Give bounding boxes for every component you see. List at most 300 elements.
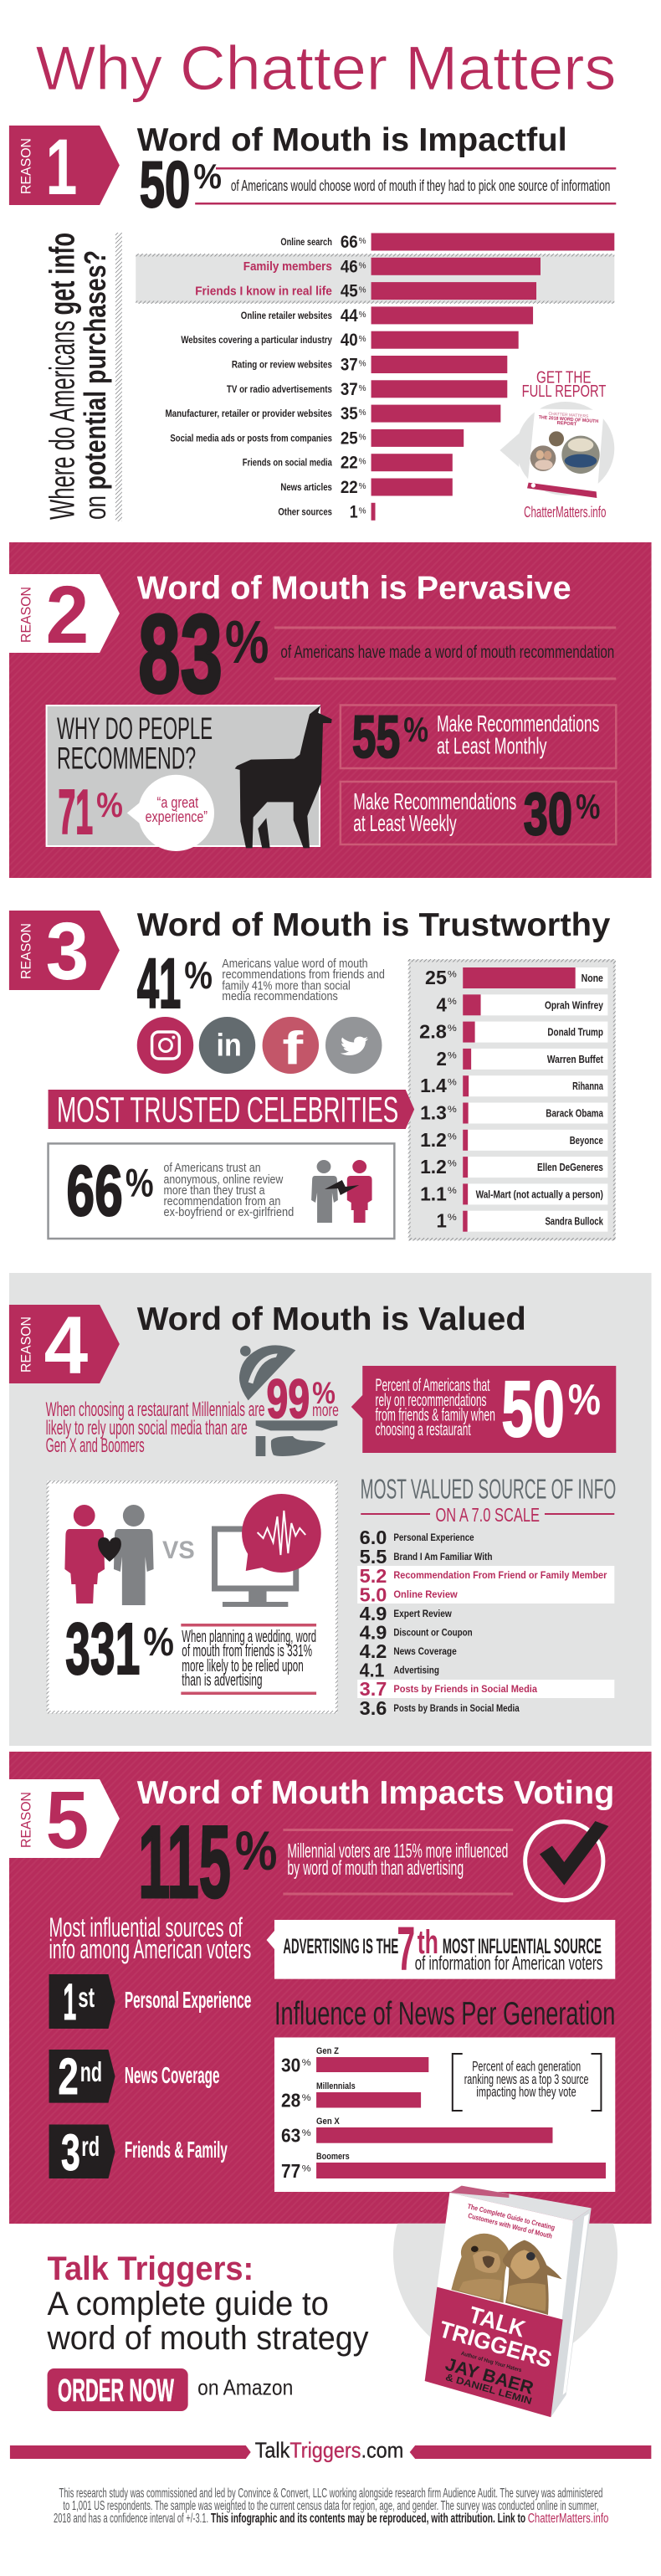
- heading: Word of Mouth is Impactful: [137, 122, 567, 158]
- icon: break-up couple: [311, 1160, 372, 1223]
- rank 2: news coverage: 2: [58, 2048, 79, 2105]
- callout: 50 percent rely on recommendations: rely on recommendations: [376, 1391, 486, 1410]
- icon: report cover: CHATTER MATTERS: [548, 412, 589, 419]
- book: talk triggers: JAY BAER: [443, 2354, 535, 2399]
- celebrity row: sandra bullock: 1: [436, 1210, 447, 1232]
- rating row: brand familiar: [360, 1546, 492, 1568]
- panel: 66 percent anonymous review: anonymous, online review: [163, 1173, 284, 1187]
- bar row: industry websites: 40: [341, 331, 358, 350]
- callout: 50 percent rely on recommendations: choosing a restaurant: [376, 1420, 471, 1439]
- stat: 331 percent: than is advertising: [182, 1671, 263, 1690]
- celebrity row: rihanna: Rihanna: [572, 1080, 603, 1092]
- stat: 331 percent: [65, 1609, 316, 1695]
- stat box: recommend monthly: 55: [352, 704, 400, 770]
- panel: 66 percent anonymous review: of Americans trust an: [163, 1161, 261, 1175]
- rating row: discount or coupon: Discount or Coupon: [393, 1627, 473, 1639]
- text: talk triggers headline: word of mouth strategy: [47, 2320, 369, 2357]
- celebrity row: oprah winfrey: %: [448, 997, 457, 1007]
- bar: boomers: Boomers: [316, 2152, 350, 2162]
- stat box: recommend monthly: [341, 704, 616, 770]
- reason tag 5: [9, 1776, 120, 1865]
- reason tag 3: 3: [46, 907, 89, 997]
- bar row: family members: %: [359, 261, 366, 270]
- stat: 99 percent more: When choosing a restaurant Millennials are: [46, 1398, 265, 1421]
- reason tag 5: REASON: [18, 1792, 34, 1848]
- stat: 115 percent: [138, 1804, 513, 1919]
- text: talk triggers headline: [47, 2250, 369, 2357]
- bracketed note: impacting how they vote: [476, 2084, 576, 2100]
- rating row: expert review: [360, 1603, 452, 1624]
- rating row: posts by brands: Posts by Brands in Social Media: [393, 1702, 520, 1714]
- callout: get the full report: [500, 368, 614, 521]
- rating row: posts by brands: [360, 1697, 520, 1719]
- footnote: 2018 and has a confidence interval of +/-3.1.: [54, 2512, 208, 2526]
- bracketed note: [453, 2054, 601, 2111]
- rating row: personal experience: [360, 1527, 474, 1548]
- bar row: social media ads: Social media ads or posts from companies: [170, 434, 332, 444]
- panel: wedding planning: [47, 1480, 338, 1714]
- callout: 50 percent rely on recommendations: from friends & family when: [376, 1406, 495, 1425]
- stat: 83 percent: [138, 593, 616, 716]
- rank 2: news coverage: News Coverage: [125, 2062, 219, 2088]
- banner: most trusted celebrities: [49, 1090, 414, 1130]
- bar row: other sources: [278, 502, 376, 521]
- celebrity row: donald trump: 2.8: [419, 1021, 447, 1043]
- reason tag 4: [9, 1301, 120, 1391]
- celebrity row: none: None: [582, 972, 603, 984]
- celebrity row: rihanna: 1.4: [420, 1075, 447, 1096]
- rating row: recommendation: 5.2: [360, 1565, 387, 1587]
- panel: 66 percent anonymous review: 66: [66, 1151, 123, 1230]
- stat: 99 percent more: 99: [267, 1368, 310, 1429]
- book: talk triggers: [393, 2186, 617, 2417]
- rating row: personal experience: 6.0: [360, 1527, 387, 1548]
- bar: millennials: 28: [281, 2090, 300, 2112]
- stat: 331 percent: 331: [65, 1609, 140, 1690]
- bar: gen z: 30: [281, 2055, 300, 2076]
- bar row: online search: %: [359, 237, 366, 246]
- panel: why do people recommend: WHY DO PEOPLE: [57, 711, 213, 746]
- rating row: advertising: 4.1: [360, 1660, 385, 1681]
- bar row: family members: [243, 257, 541, 276]
- bar row: friends in real life: [195, 282, 536, 301]
- panel: 66 percent anonymous review: recommendation from an: [163, 1194, 280, 1208]
- celebrity row: barack obama: Barack Obama: [546, 1106, 604, 1120]
- callout: get the full report: GET THE: [536, 368, 592, 387]
- rank 3: friends and family: 3: [61, 2124, 80, 2181]
- stat box: recommend monthly: at Least Monthly: [437, 732, 546, 758]
- stat: 50 percent: 50: [140, 149, 190, 221]
- bar: gen z: %: [302, 2058, 311, 2068]
- bar chart: information sources: [165, 233, 614, 521]
- reason tag 4: REASON: [18, 1316, 34, 1373]
- stat: 50 percent: [140, 149, 616, 221]
- footer banner: talktriggers.com: [10, 2439, 651, 2462]
- bar: millennials: Millennials: [316, 2081, 356, 2091]
- stat: 99 percent more: more: [312, 1401, 339, 1420]
- rank 1: personal experience: Personal Experience: [125, 1987, 251, 2013]
- bar row: news articles: [280, 478, 453, 497]
- text: most influential sources: Most influential sources of: [49, 1912, 243, 1942]
- celebrity row: wal-mart: 1.1: [420, 1183, 447, 1204]
- celebrity row: ellen degeneres: %: [448, 1159, 457, 1169]
- icon: report cover: [527, 408, 604, 498]
- bar row: other sources: Other sources: [278, 507, 332, 517]
- rank 1: personal experience: st: [78, 1982, 95, 2013]
- bar row: online search: Online search: [280, 238, 332, 248]
- callout: advertising is the 7th: 7: [397, 1914, 415, 1983]
- reason tag 1: REASON: [18, 138, 34, 194]
- icon: report cover: REPORT: [556, 421, 577, 428]
- button: order now: ORDER NOW: [58, 2373, 174, 2409]
- bar row: online retailer websites: %: [359, 310, 366, 320]
- rating row: brand familiar: 5.5: [360, 1546, 387, 1568]
- bar: gen x: [281, 2117, 552, 2147]
- rating row: news coverage: [360, 1640, 457, 1662]
- callout: advertising is the 7th: th: [418, 1924, 438, 1961]
- celebrity row: rihanna: [420, 1075, 607, 1096]
- rating row: expert review: 4.9: [360, 1603, 387, 1624]
- bar row: family members: Family members: [243, 259, 332, 274]
- stat: 83 percent: %: [225, 609, 269, 676]
- bar row: other sources: %: [359, 506, 366, 516]
- bar: boomers: %: [302, 2163, 311, 2174]
- icon: linkedin: in: [216, 1028, 242, 1064]
- bar row: online retailer websites: 44: [341, 306, 358, 326]
- icon: report cover: THE 2018 WORD OF MOUTH: [538, 415, 598, 424]
- rank 2: news coverage: nd: [80, 2056, 102, 2087]
- callout: get the full report: ChatterMatters.info: [524, 504, 606, 521]
- book: talk triggers: TRIGGERS: [437, 2316, 555, 2373]
- bar row: online search: 66: [341, 233, 358, 252]
- bar row: online search: [280, 233, 614, 252]
- celebrity row: donald trump: Donald Trump: [547, 1026, 603, 1039]
- reason tag 2: 2: [46, 571, 89, 660]
- icon: facebook: [263, 1017, 319, 1075]
- text: talk triggers headline: A complete guide to: [48, 2286, 329, 2322]
- vertical chart question: get info: [42, 233, 81, 315]
- celebrity row: ellen degeneres: 1.2: [420, 1156, 447, 1178]
- rank 3: friends and family: rd: [81, 2131, 100, 2162]
- bar: gen x: Gen X: [316, 2117, 340, 2127]
- stat: 83 percent: 83: [138, 593, 223, 716]
- panel: most valued source of info: [357, 1473, 616, 1719]
- bar: gen x: %: [302, 2128, 311, 2138]
- celebrity row: none: [425, 967, 607, 988]
- callout: get the full report: FULL REPORT: [522, 382, 606, 401]
- celebrity row: wal-mart: Wal-Mart (not actually a person): [476, 1188, 603, 1200]
- book: talk triggers: Author of Hug Your Haters: [460, 2351, 522, 2373]
- celebrity row: wal-mart: %: [448, 1186, 457, 1196]
- bar row: rating or review websites: [232, 355, 507, 375]
- book: talk triggers: Customers with Word of Mouth: [467, 2211, 553, 2240]
- stat: 99 percent more: likely to rely upon social media than are: [46, 1417, 248, 1439]
- title: Why Chatter Matters: [36, 33, 616, 103]
- vertical chart question: on: [79, 495, 112, 520]
- bar: millennials: %: [302, 2093, 311, 2103]
- celebrity row: oprah winfrey: [436, 993, 607, 1015]
- bar row: manufacturer websites: %: [359, 408, 366, 418]
- celebrity row: sandra bullock: Sandra Bullock: [545, 1215, 603, 1228]
- rating row: news coverage: News Coverage: [393, 1645, 457, 1657]
- rating row: discount or coupon: [360, 1622, 473, 1644]
- panel: reason 4 word of mouth is valued: [9, 1273, 652, 1746]
- bar row: friends in real life: 45: [341, 282, 358, 301]
- rating row: brand familiar: Brand I Am Familiar With: [393, 1551, 492, 1563]
- bar row: manufacturer websites: [165, 404, 500, 423]
- celebrity row: beyonce: %: [448, 1131, 457, 1142]
- reason tag 3: REASON: [18, 923, 34, 979]
- icon: llama: [235, 706, 332, 848]
- stat: 99 percent more: [46, 1368, 339, 1457]
- icon: restaurant cloche: [239, 1345, 337, 1456]
- celebrity row: ellen degeneres: Ellen DeGeneres: [537, 1161, 603, 1173]
- stat box: recommend weekly: [341, 781, 616, 847]
- bar row: social media ads: [170, 428, 464, 448]
- heading: Word of Mouth is Valued: [137, 1301, 526, 1337]
- bar row: friends on social media: 22: [341, 454, 358, 473]
- bar row: tv or radio: [227, 380, 507, 399]
- celebrity row: donald trump: [419, 1021, 607, 1043]
- vertical chart question: Where do Americans: [42, 321, 81, 520]
- bar row: news articles: 22: [341, 478, 358, 497]
- bar row: online retailer websites: Online retailer websites: [241, 311, 332, 321]
- celebrity row: barack obama: 1.3: [420, 1101, 447, 1124]
- callout: 50 percent rely on recommendations: 50: [501, 1365, 565, 1454]
- panel: reason 5 word of mouth impacts voting: [9, 1752, 652, 2224]
- icon: twitter: [325, 1017, 382, 1074]
- rating row: online review: 5.0: [360, 1583, 387, 1605]
- celebrity row: beyonce: 1.2: [420, 1129, 447, 1151]
- stat: 331 percent: %: [143, 1620, 174, 1665]
- rating row: news coverage: 4.2: [360, 1640, 387, 1662]
- book: talk triggers: TALK: [466, 2301, 528, 2343]
- celebrity row: sandra bullock: %: [448, 1213, 457, 1223]
- panel: 66 percent anonymous review: ex-boyfriend or ex-girlfriend: [163, 1205, 294, 1219]
- reason tag 2: REASON: [18, 587, 34, 643]
- highlight band: friends and family: [136, 254, 614, 304]
- stat: 115 percent: Millennial voters are 115% more influenced: [287, 1840, 508, 1863]
- panel: talk triggers promo: [47, 2186, 617, 2417]
- rating row: online review: [360, 1583, 458, 1605]
- panel: why do people recommend: [47, 706, 332, 851]
- footnote: ChatterMatters.info: [528, 2512, 608, 2526]
- panel: why do people recommend: %: [96, 785, 123, 824]
- bar row: friends on social media: [243, 454, 453, 473]
- callout: 50 percent rely on recommendations: Percent of Americans that: [376, 1376, 490, 1395]
- speech bubble: a great experience: experience”: [146, 808, 208, 825]
- callout: advertising is the 7th: ADVERTISING IS THE: [283, 1935, 398, 1958]
- reason tag 2: [9, 571, 120, 660]
- celebrity row: barack obama: %: [448, 1105, 457, 1115]
- bar row: rating or review websites: Rating or review websites: [232, 360, 332, 371]
- callout: advertising is the 7th: [267, 1914, 615, 1983]
- celebrity row: warren buffet: Warren Buffet: [547, 1053, 603, 1065]
- celebrity row: warren buffet: %: [448, 1050, 457, 1060]
- rating row: posts by friends: 3.7: [360, 1678, 387, 1700]
- rating row: recommendation: Recommendation From Friend or Family Member: [393, 1569, 607, 1581]
- panel: why do people recommend: 71: [58, 777, 93, 847]
- bar row: tv or radio: TV or radio advertisements: [227, 385, 332, 395]
- vertical chart question: potential purchases?: [79, 250, 112, 490]
- bracketed note: Percent of each generation: [472, 2058, 581, 2075]
- heading: Word of Mouth is Trustworthy: [137, 907, 611, 943]
- banner: most trusted celebrities: MOST TRUSTED CELEBRITIES: [57, 1090, 398, 1130]
- stat: 331 percent: more likely to be relied upon: [182, 1657, 304, 1675]
- stat box: recommend weekly: Make Recommendations: [353, 788, 516, 814]
- rating row: advertising: Advertising: [393, 1665, 439, 1676]
- stat: 331 percent: of mouth from friends is 331%: [182, 1642, 312, 1660]
- bar row: industry websites: %: [359, 335, 366, 344]
- bar: boomers: [281, 2152, 606, 2182]
- vertical chart question: [42, 233, 122, 521]
- heading: Word of Mouth is Pervasive: [137, 570, 571, 607]
- stat: 115 percent: 115: [138, 1804, 231, 1919]
- bar row: friends on social media: Friends on social media: [243, 459, 332, 469]
- speech bubble: a great experience: [127, 775, 214, 851]
- celebrity row: oprah winfrey: 4: [436, 993, 447, 1015]
- rank 1: personal experience: [49, 1973, 251, 2030]
- bar row: friends on social media: %: [359, 458, 366, 467]
- icon: linkedin: [199, 1017, 255, 1074]
- stat: 115 percent: %: [235, 1819, 277, 1881]
- stat: 41 percent: Americans value word of mouth: [222, 957, 368, 971]
- celebrity row: ellen degeneres: [420, 1156, 607, 1178]
- speech bubble: a great experience: “a great: [157, 794, 198, 811]
- stat: 41 percent: media recommendations: [222, 989, 338, 1003]
- celebrity row: beyonce: Beyonce: [570, 1134, 603, 1147]
- bar row: industry websites: [181, 331, 519, 350]
- bar row: social media ads: %: [359, 433, 366, 442]
- bar chart: news by generation: [274, 2037, 615, 2192]
- celebrity row: oprah winfrey: Oprah Winfrey: [545, 998, 604, 1011]
- rating row: posts by friends: [360, 1678, 537, 1700]
- callout: 50 percent rely on recommendations: [351, 1365, 616, 1454]
- reason tag 5: 5: [46, 1776, 89, 1865]
- stat box: recommend weekly: 30: [524, 781, 572, 847]
- bar row: industry websites: Websites covering a particular industry: [181, 336, 332, 346]
- stat: 99 percent more: Gen X and Boomers: [46, 1434, 145, 1457]
- stat: 331 percent: When planning a wedding, word: [182, 1628, 316, 1646]
- celebrity row: barack obama: [420, 1101, 607, 1124]
- bar row: social media ads: 25: [341, 428, 358, 448]
- subheading: on a 7.0 scale: ON A 7.0 SCALE: [435, 1504, 540, 1526]
- celebrity row: sandra bullock: [436, 1210, 607, 1232]
- stat: 50 percent: %: [193, 157, 222, 196]
- reason tag 3: [9, 907, 120, 997]
- celebrity row: wal-mart: [420, 1183, 607, 1204]
- rating row: recommendation: [360, 1565, 607, 1587]
- bar: millennials: [281, 2081, 421, 2112]
- text: most influential sources: info among American voters: [49, 1934, 251, 1964]
- label: vs: VS: [162, 1537, 195, 1564]
- stat: 41 percent: [137, 944, 385, 1023]
- bar row: family members: 46: [341, 257, 358, 276]
- text: most influential sources: [49, 1912, 251, 1964]
- icon: advertising monitor with speech bubble: [215, 1494, 321, 1607]
- rating row: expert review: Expert Review: [393, 1608, 452, 1619]
- bar: gen z: Gen Z: [316, 2046, 339, 2056]
- text: on amazon: on Amazon: [197, 2376, 293, 2400]
- rank 3: friends and family: [49, 2124, 228, 2181]
- celebrity row: warren buffet: [436, 1048, 607, 1070]
- button: order now: [48, 2368, 188, 2411]
- bar row: online retailer websites: [241, 306, 533, 326]
- celebrity row: warren buffet: 2: [436, 1048, 447, 1070]
- bar row: friends in real life: %: [359, 286, 366, 295]
- bar: gen x: 63: [281, 2124, 300, 2147]
- bar row: news articles: %: [359, 482, 366, 491]
- celebrity row: rihanna: %: [448, 1078, 457, 1088]
- bracketed note: ranking news as a top 3 source: [464, 2071, 589, 2087]
- bar row: other sources: 1: [350, 502, 358, 521]
- bar row: manufacturer websites: Manufacturer, retailer or provider websites: [165, 409, 332, 419]
- bar: gen z: [281, 2046, 428, 2076]
- bar row: tv or radio: %: [359, 384, 366, 393]
- rank 3: friends and family: Friends & Family: [125, 2137, 228, 2163]
- text: talk triggers headline: Talk Triggers:: [48, 2250, 254, 2287]
- stat: 41 percent: 41: [137, 944, 181, 1023]
- rank 1: personal experience: 1: [63, 1973, 76, 2030]
- reason tag 1: [9, 123, 120, 212]
- bar row: rating or review websites: 37: [341, 355, 358, 375]
- panel: reason 1 word of mouth is impactful: [9, 122, 616, 521]
- reason tag 4: 4: [44, 1301, 88, 1391]
- icon: couple with heart: [64, 1505, 154, 1605]
- celebrity row: none: %: [448, 969, 457, 980]
- footnote: [54, 2486, 608, 2526]
- rank 2: news coverage: [49, 2048, 219, 2105]
- panel: reason 2 word of mouth is pervasive: [9, 542, 652, 878]
- reason tag 1: 1: [46, 123, 77, 212]
- rating row: personal experience: Personal Experience: [393, 1532, 474, 1543]
- rating row: posts by friends: Posts by Friends in Social Media: [393, 1683, 537, 1695]
- stat: 41 percent: family 41% more than social: [222, 979, 351, 993]
- stat box: recommend monthly: %: [403, 710, 428, 749]
- panel: 66 percent anonymous review: more than they trust a: [163, 1183, 265, 1198]
- bar row: manufacturer websites: 35: [341, 404, 358, 423]
- rating row: online review: Online Review: [393, 1588, 458, 1600]
- rating row: advertising: [360, 1660, 439, 1681]
- rating row: discount or coupon: 4.9: [360, 1622, 387, 1644]
- bar: boomers: 77: [281, 2160, 300, 2182]
- stat: 41 percent: %: [184, 954, 213, 997]
- book: talk triggers: & DANIEL LEMIN: [444, 2372, 533, 2407]
- footer banner: talktriggers.com: TalkTriggers.com: [255, 2439, 403, 2462]
- panel: why do people recommend: RECOMMEND?: [57, 741, 196, 775]
- celebrity row: donald trump: %: [448, 1024, 457, 1034]
- stat: 41 percent: recommendations from friends and: [222, 967, 385, 982]
- stat: 115 percent: by word of mouth than advertising: [287, 1857, 464, 1880]
- stat box: recommend weekly: %: [576, 787, 600, 826]
- heading: Word of Mouth Impacts Voting: [137, 1775, 614, 1811]
- icon: instagram: [137, 1017, 193, 1074]
- stat box: recommend weekly: at Least Weekly: [353, 810, 457, 836]
- panel: 66 percent anonymous review: [49, 1143, 394, 1239]
- icon: check mark: [525, 1821, 608, 1901]
- celebrity row: beyonce: [420, 1129, 607, 1151]
- callout: 50 percent rely on recommendations: %: [568, 1375, 601, 1424]
- bar row: friends in real life: Friends I know in real life: [195, 284, 332, 298]
- panel: reason 3 word of mouth is trustworthy: [9, 907, 616, 1240]
- panel: celebrity chart: [408, 959, 616, 1240]
- bar row: news articles: News articles: [280, 483, 332, 493]
- stat: 99 percent more: %: [312, 1376, 336, 1410]
- celebrity row: none: 25: [425, 967, 447, 988]
- panel: 66 percent anonymous review: %: [126, 1161, 154, 1205]
- icon: facebook: f: [282, 1022, 304, 1075]
- rating row: posts by brands: 3.6: [360, 1697, 387, 1719]
